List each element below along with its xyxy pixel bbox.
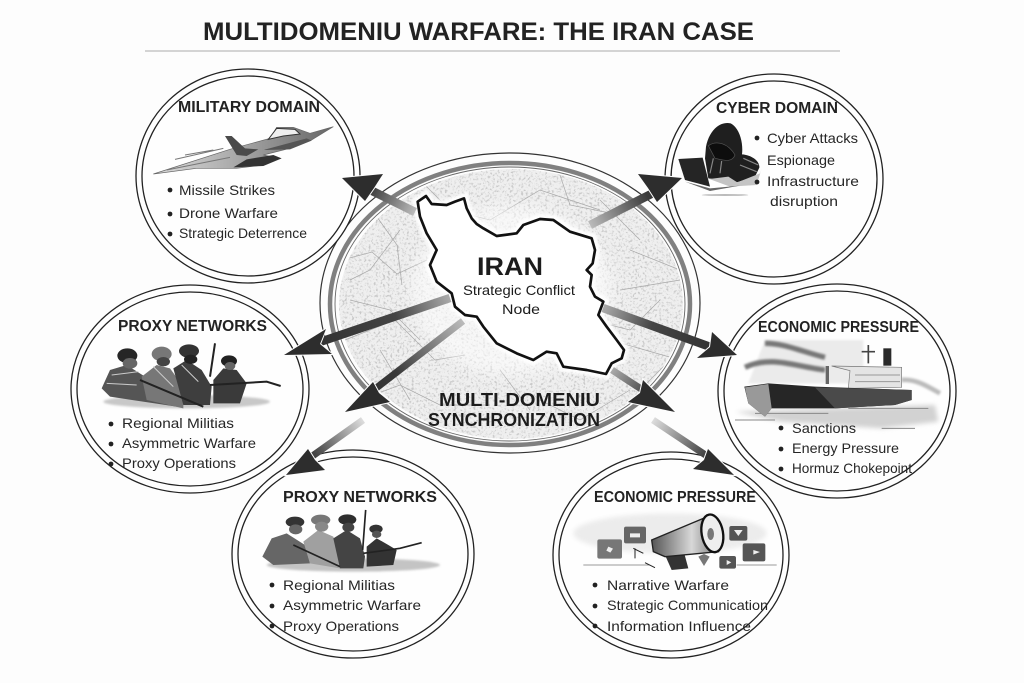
bullet list: Regional Militias	[283, 577, 395, 593]
arrow: to economic pressure right	[603, 308, 737, 358]
bullet list: Information Influence	[607, 618, 751, 634]
bullet list: Asymmetric Warfare	[283, 597, 421, 613]
icon: soldiers	[262, 510, 440, 572]
bullet list: Proxy Operations	[283, 618, 399, 634]
panel: cyber domain	[665, 74, 883, 284]
label: IRAN: IRAN	[477, 253, 543, 281]
Iran outline	[418, 196, 624, 374]
panel: economic pressure right	[718, 284, 956, 498]
bullet list	[755, 130, 859, 209]
arrow: to proxy networks left	[284, 298, 450, 355]
bullet list: Infrastructure	[767, 173, 859, 189]
panel: proxy networks bottom	[232, 450, 474, 658]
arrow: to economic pressure bottom	[653, 420, 734, 475]
bullet list: Cyber Attacks	[767, 130, 858, 146]
arrow: to proxy networks bottom	[286, 420, 363, 475]
icon: oil tanker	[735, 340, 940, 428]
icon: soldiers	[102, 343, 281, 408]
bullet list: Sanctions	[792, 420, 856, 436]
map texture	[339, 169, 683, 439]
arrow: to cyber domain	[590, 174, 682, 225]
heading: CYBER DOMAIN	[716, 100, 838, 117]
bullet list: Narrative Warfare	[607, 577, 729, 593]
panel: proxy networks left	[71, 285, 309, 493]
bullet list: Proxy Operations	[122, 455, 236, 471]
bullet list: Espionage	[767, 152, 835, 168]
bullet list: disruption	[770, 193, 838, 209]
bullet list: Strategic Deterrence	[179, 225, 307, 241]
bullet list	[109, 415, 256, 471]
bullet list	[168, 182, 307, 241]
bullet list	[779, 420, 912, 476]
panel: military domain	[136, 69, 360, 283]
arrow: lower right inner	[612, 370, 675, 412]
label: strategic conflict node: Node	[502, 301, 540, 317]
heading: MILITARY DOMAIN	[178, 99, 320, 116]
label: synchronization	[428, 390, 600, 430]
bullet list: Strategic Communication	[607, 597, 768, 613]
heading: ECONOMIC PRESSURE	[758, 319, 919, 336]
bullet list: Drone Warfare	[179, 205, 278, 221]
bullet list: Energy Pressure	[792, 440, 899, 456]
bullet list: Regional Militias	[122, 415, 234, 431]
bullet list: Asymmetric Warfare	[122, 435, 256, 451]
heading: PROXY NETWORKS	[118, 318, 267, 335]
bullet list	[593, 577, 768, 634]
heading: ECONOMIC PRESSURE	[594, 489, 756, 506]
title: MULTIDOMENIU WARFARE: THE IRAN CASE	[203, 18, 754, 46]
label: strategic conflict node: Strategic Conflict	[463, 282, 575, 298]
panel: economic pressure bottom	[553, 452, 789, 658]
label: synchronization: SYNCHRONIZATION	[428, 410, 600, 430]
icon: hooded hacker	[678, 123, 762, 196]
heading: PROXY NETWORKS	[283, 489, 437, 506]
central hub: Iran map	[320, 153, 700, 453]
bullet list: Hormuz Chokepoint	[792, 460, 912, 476]
icon: fighter jet	[153, 127, 333, 174]
label: strategic conflict node	[463, 282, 575, 317]
bullet list	[270, 577, 421, 634]
label: synchronization: MULTI-DOMENIU	[439, 390, 600, 410]
arrow: lower left inner	[345, 321, 463, 412]
arrow: to military domain	[342, 174, 415, 212]
bullet list: Missile Strikes	[179, 182, 275, 198]
icon: megaphone with media icons	[573, 513, 777, 570]
